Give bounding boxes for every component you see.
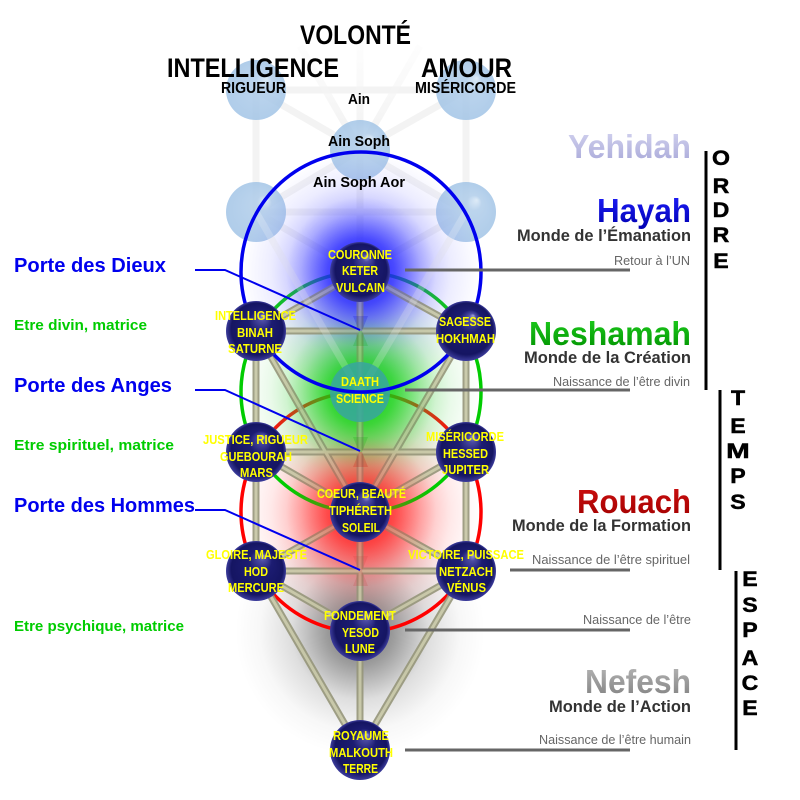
sphere labels: GUEBOURAH bbox=[220, 449, 292, 464]
glow tint over connectors bbox=[286, 197, 436, 587]
sphere labels: HESSED bbox=[443, 446, 488, 461]
ghost sphere: upper left bbox=[226, 60, 286, 120]
sphere labels: GLOIRE, MAJESTÉ bbox=[206, 547, 307, 562]
sphere labels: BINAH bbox=[237, 325, 273, 340]
ghost connectors veil bbox=[256, 212, 466, 392]
circle: red bbox=[241, 392, 481, 632]
title: attributes: INTELLIGENCE bbox=[167, 53, 339, 83]
glow: blue at Keter bbox=[241, 152, 481, 392]
sphere labels: VÉNUS bbox=[447, 580, 486, 595]
left labels: gates and matrices: Porte des Anges bbox=[14, 375, 172, 397]
world: Hayah: Retour à l’UN bbox=[614, 254, 690, 268]
ghost sphere: lower right bbox=[436, 182, 496, 242]
bracket: TEMPS: P bbox=[730, 464, 746, 488]
bracket: ORDRE bbox=[706, 146, 730, 390]
sphere labels: VULCAIN bbox=[336, 280, 385, 295]
sphere: Binah bbox=[226, 301, 286, 361]
bracket: TEMPS: S bbox=[730, 490, 746, 514]
bracket: ORDRE: D bbox=[713, 198, 729, 222]
bracket: ESPACE: E bbox=[742, 696, 758, 720]
bracket: ESPACE: P bbox=[742, 618, 758, 642]
pointer: Porte des Hommes bbox=[195, 510, 360, 570]
circle: green bbox=[241, 272, 481, 512]
title: attributes: VOLONTÉ bbox=[300, 19, 411, 50]
sphere labels: MARS bbox=[240, 465, 273, 480]
sphere labels: HOKHMAH bbox=[436, 331, 495, 346]
sphere: Daath bbox=[330, 362, 390, 422]
world: Neshamah: Monde de la Création bbox=[524, 348, 691, 367]
world: Hayah bbox=[517, 192, 691, 268]
sphere: Tiphereth bbox=[330, 482, 390, 542]
bracket: TEMPS: E bbox=[730, 414, 746, 438]
gate marker: Dieux bbox=[353, 316, 368, 346]
sphere labels: MALKOUTH bbox=[329, 745, 393, 760]
bracket: TEMPS: T bbox=[731, 386, 746, 410]
sphere labels: SOLEIL bbox=[342, 520, 380, 535]
leader lines to the worlds bbox=[405, 270, 630, 750]
circle: blue bbox=[241, 152, 481, 392]
sphere labels: TIPHÉRETH bbox=[329, 503, 392, 518]
left labels: gates and matrices: Porte des Dieux bbox=[14, 255, 166, 277]
sphere: Guebourah bbox=[226, 422, 286, 482]
pointer: Porte des Dieux bbox=[195, 270, 360, 330]
world: Rouach bbox=[512, 483, 691, 627]
sphere labels: KETER bbox=[342, 263, 378, 278]
sphere labels: JUSTICE, RIGUEUR bbox=[203, 432, 309, 447]
sphere labels: NETZACH bbox=[439, 564, 493, 579]
world: Nefesh: Naissance de l’être humain bbox=[539, 733, 691, 747]
sphere labels: FONDEMENT bbox=[324, 608, 396, 623]
sphere labels: DAATH bbox=[341, 374, 379, 389]
title: attributes: AMOUR bbox=[421, 53, 512, 83]
sphere labels bbox=[203, 247, 524, 776]
glow: green at Daath bbox=[241, 272, 481, 512]
title: attributes: Ain Soph bbox=[328, 133, 390, 150]
bracket: ESPACE: E bbox=[742, 567, 758, 591]
world: Rouach: Naissance de l’être bbox=[583, 613, 691, 627]
left labels: gates and matrices: Etre spirituel, matrice bbox=[14, 437, 174, 454]
world: Nefesh bbox=[539, 663, 691, 747]
world: Hayah: Monde de l’Émanation bbox=[517, 226, 691, 245]
world: Neshamah: Neshamah bbox=[529, 315, 691, 352]
title: attributes: Ain bbox=[348, 91, 370, 108]
pointer: Porte des Anges bbox=[195, 390, 360, 451]
bracket: ORDRE: E bbox=[713, 249, 729, 273]
sphere: Keter bbox=[330, 242, 390, 302]
sphere labels: MISÉRICORDE bbox=[426, 429, 504, 444]
bracket: ESPACE bbox=[736, 567, 758, 750]
world: Nefesh: Nefesh bbox=[585, 663, 691, 700]
left labels: gates and matrices: Etre psychique, matrice bbox=[14, 618, 184, 635]
tree connectors bbox=[256, 272, 466, 750]
left labels: gates and matrices: Porte des Hommes bbox=[14, 495, 195, 517]
sphere: Malkouth bbox=[330, 720, 390, 780]
world: Rouach: Rouach bbox=[577, 483, 691, 520]
title: attributes: RIGUEUR bbox=[221, 80, 286, 97]
bracket: ESPACE: S bbox=[742, 593, 758, 617]
sphere labels: JUPITER bbox=[442, 462, 490, 477]
sphere: Hod bbox=[226, 541, 286, 601]
sphere labels: COURONNE bbox=[328, 247, 392, 262]
title: attributes: Ain Soph Aor bbox=[313, 174, 405, 191]
sphere: Hessed bbox=[436, 422, 496, 482]
left labels: gates and matrices: Etre divin, matrice bbox=[14, 317, 147, 334]
bracket: ORDRE: R bbox=[713, 174, 729, 198]
sphere labels: LUNE bbox=[345, 641, 375, 656]
glow: grey at Yesod bbox=[235, 506, 485, 756]
bracket: TEMPS: M bbox=[726, 439, 750, 463]
bracket: ESPACE: A bbox=[742, 646, 758, 670]
glow: red at Tiphereth bbox=[241, 392, 481, 632]
title: attributes bbox=[167, 19, 516, 191]
ghost tree connectors bbox=[256, 30, 466, 392]
sphere labels: HOD bbox=[244, 564, 268, 579]
world: Rouach: Monde de la Formation bbox=[512, 516, 691, 535]
world: Yehidah: Yehidah bbox=[568, 128, 691, 165]
bracket: ORDRE: O bbox=[712, 146, 730, 170]
sphere labels: YESOD bbox=[342, 625, 379, 640]
world: Hayah: Hayah bbox=[597, 192, 691, 229]
bracket: ESPACE: C bbox=[742, 671, 758, 695]
ghost sphere: upper right bbox=[436, 60, 496, 120]
bracket: ORDRE: R bbox=[713, 223, 729, 247]
sphere: Hokhmah bbox=[436, 301, 496, 361]
sphere: Yesod bbox=[330, 601, 390, 661]
world: Nefesh: Monde de l’Action bbox=[549, 697, 691, 716]
sphere labels: SATURNE bbox=[228, 341, 282, 356]
title: attributes: MISÉRICORDE bbox=[415, 78, 516, 97]
world: Rouach: Naissance de l’être spirituel bbox=[532, 553, 690, 567]
world: Neshamah bbox=[524, 315, 691, 389]
sphere labels: ROYAUME bbox=[333, 728, 389, 743]
world: Neshamah: Naissance de l’être divin bbox=[553, 375, 690, 389]
sphere labels: SCIENCE bbox=[336, 391, 384, 406]
ghost sphere: centre bbox=[330, 120, 390, 180]
sphere labels: MERCURE bbox=[228, 580, 284, 595]
sphere: Netzach bbox=[436, 541, 496, 601]
sphere labels: INTELLIGENCE bbox=[215, 308, 296, 323]
gate marker: Hommes bbox=[353, 556, 368, 586]
sphere labels: SAGESSE bbox=[439, 314, 491, 329]
left labels: gates and matrices bbox=[14, 255, 195, 635]
sphere labels: COEUR, BEAUTÉ bbox=[317, 486, 406, 501]
bracket: TEMPS bbox=[720, 386, 750, 570]
sphere labels: VICTOIRE, PUISSACE bbox=[408, 547, 524, 562]
sphere labels: TERRE bbox=[343, 761, 378, 776]
gate marker: Anges bbox=[353, 437, 368, 467]
ghost sphere: lower left bbox=[226, 182, 286, 242]
